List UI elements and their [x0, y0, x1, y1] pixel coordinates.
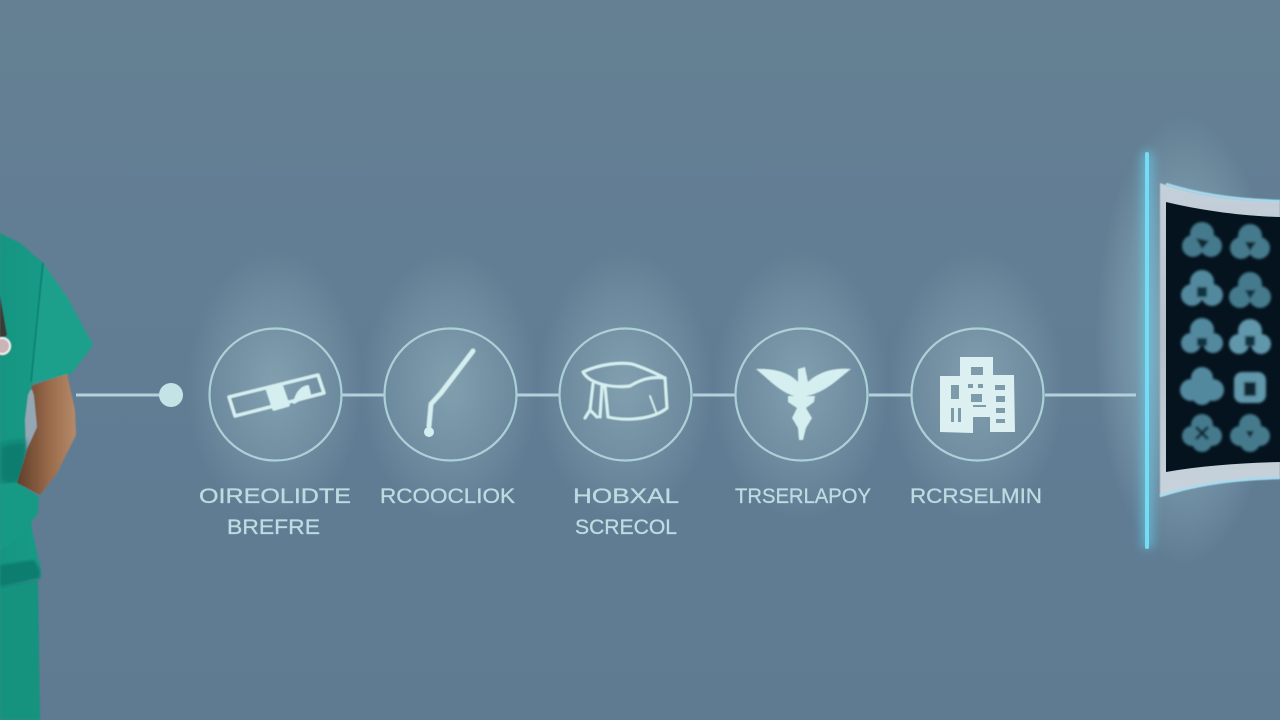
step 3: medical school	[537, 250, 713, 539]
building windows	[951, 367, 1005, 423]
display glow	[1095, 115, 1275, 565]
ring	[736, 328, 868, 460]
scan row 5 right	[1230, 414, 1270, 452]
scan row 3 right	[1229, 319, 1271, 354]
ring	[384, 328, 516, 460]
scan row 2 right	[1229, 272, 1271, 308]
vertical light bar glow	[1142, 152, 1153, 548]
hand in pocket	[0, 483, 39, 550]
step 2: residency tool	[362, 250, 538, 520]
gap between arm and torso	[24, 390, 38, 450]
step 5: hospital	[889, 250, 1065, 520]
scan row 5 left	[1182, 414, 1222, 452]
frame bottom highlight	[1160, 478, 1280, 496]
label: RCRSELMIN	[910, 485, 1042, 508]
brain scan display	[1095, 115, 1280, 565]
dark screen	[1166, 202, 1280, 472]
icon: scalpel	[429, 351, 473, 426]
step 4: internship	[713, 250, 889, 520]
label line 2: BREFRE	[227, 516, 320, 539]
icon: hospital building	[940, 357, 1015, 433]
connector 4-5	[869, 394, 911, 396]
glow	[187, 250, 363, 520]
icon: rectangular device	[229, 375, 324, 416]
label: HOBXAL	[573, 485, 679, 508]
glow	[537, 250, 713, 520]
glow	[889, 250, 1065, 520]
neck opening	[0, 295, 7, 340]
vertical light bar	[1145, 152, 1149, 549]
frame top highlight	[1166, 184, 1280, 201]
connector 3-4	[693, 394, 735, 396]
doctor figure in teal scrubs	[0, 233, 93, 720]
forearm	[17, 374, 76, 495]
scan row 4 left	[1180, 367, 1224, 405]
glow	[362, 250, 538, 520]
sleeve fold	[31, 263, 43, 382]
brain scans	[1180, 222, 1271, 452]
display frame	[1160, 183, 1280, 497]
ring	[560, 328, 692, 460]
scrub trousers	[0, 580, 40, 720]
scan row 1 left	[1182, 222, 1222, 257]
label: RCOOCLIOK	[380, 485, 515, 508]
scan row 1 right	[1230, 224, 1270, 259]
icon: caduceus	[756, 367, 851, 440]
connector 2-3	[517, 394, 559, 396]
stethoscope	[0, 338, 10, 354]
label: OIREOLIDTE	[199, 485, 351, 508]
icon: graduation cap	[583, 363, 667, 419]
torso shadow	[0, 440, 26, 484]
ring	[210, 328, 342, 460]
connector 1-2	[342, 394, 384, 396]
label: TRSERLAPOY	[735, 485, 871, 508]
scan row 2 left	[1181, 270, 1223, 306]
glow	[713, 250, 889, 520]
timeline connector lines	[76, 394, 1136, 396]
sleeve shading	[30, 263, 93, 383]
shirt hem shadow	[0, 560, 40, 587]
end line	[1045, 394, 1136, 396]
scrub top	[0, 233, 93, 587]
scalpel tip	[424, 427, 434, 437]
scan row 4 right	[1234, 372, 1266, 403]
label line 2: SCRECOL	[575, 516, 677, 539]
scan row 3 left	[1181, 318, 1223, 353]
ring	[912, 328, 1044, 460]
timeline start dot	[159, 383, 183, 407]
start line	[76, 394, 165, 396]
step 1: pre-med	[187, 250, 363, 539]
